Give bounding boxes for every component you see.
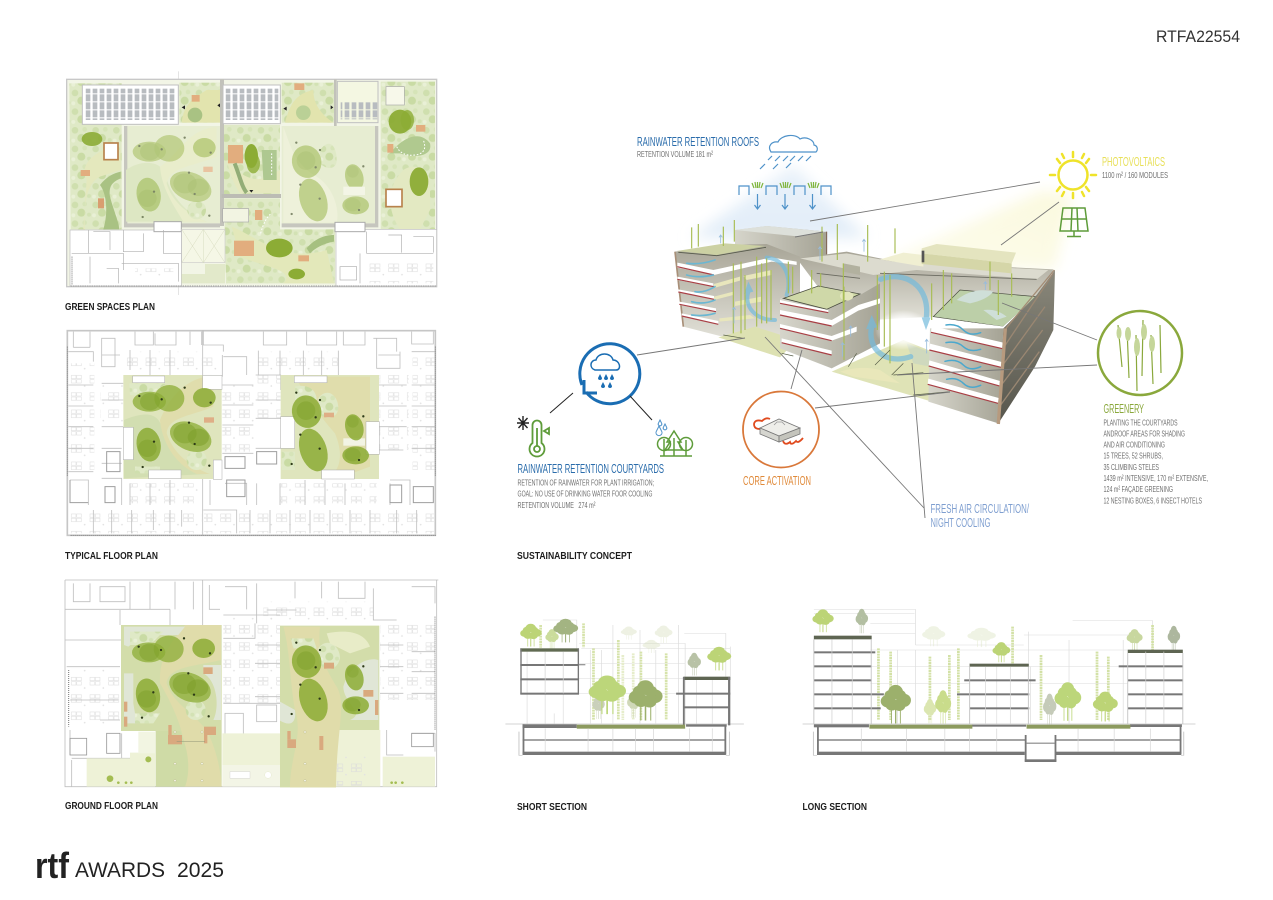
caption: typical floor plan: TYPICAL FLOOR PLAN (65, 550, 158, 562)
small garden 2 (282, 83, 334, 123)
label: photovoltaics: PHOTOVOLTAICS (1102, 155, 1165, 169)
sustainability concept diagram (517, 135, 1208, 530)
plan: typical floor (67, 330, 436, 536)
icon: thermometer (517, 416, 549, 457)
light fan: rain (690, 165, 868, 238)
label: greenery (1104, 402, 1208, 506)
label: greenery: 35 CLIMBING STELES (1104, 462, 1159, 472)
icon: greenery climbing plants (1098, 311, 1182, 395)
logo: rtf awards 2025: rtf (35, 845, 70, 886)
ground floor walls (65, 580, 438, 787)
side elevation (998, 270, 1055, 424)
left wing (675, 243, 800, 340)
icon: sun (1050, 152, 1096, 198)
caption: short section: SHORT SECTION (517, 801, 587, 813)
label: fresh air circulation (930, 502, 1029, 530)
label: rainwater retention roofs: RETENTION VOLUME 181 m² (637, 149, 713, 159)
label: greenery: PLANTING THE COURTYARDS (1104, 418, 1178, 428)
caption: sustainability concept: SUSTAINABILITY CONCEPT (517, 550, 632, 562)
logo: rtf awards 2025: AWARDS (75, 858, 165, 882)
building structure (803, 636, 1195, 762)
small upward arrows (719, 235, 987, 357)
icon: solar panel (1060, 208, 1088, 236)
offices on roof level (70, 222, 437, 286)
climbing steles (692, 220, 1012, 363)
label: fresh air circulation: FRESH AIR CIRCULATION/ (930, 502, 1029, 516)
photovoltaic roof 3 (337, 81, 378, 123)
plan: green spaces (67, 71, 437, 295)
label: rainwater retention roofs (637, 135, 759, 159)
courtyard right (281, 375, 379, 479)
interior dark ticks (723, 335, 950, 395)
arrows to cooling and trees (550, 393, 652, 420)
logo: rtf awards 2025 (35, 845, 224, 886)
icon: trees and droplets (656, 420, 692, 456)
caption: long section: LONG SECTION (802, 801, 867, 813)
green strip right (381, 82, 435, 229)
label: rainwater retention roofs: RAINWATER RETENTION ROOFS (637, 135, 759, 149)
back roof block (735, 226, 827, 265)
label: photovoltaics: 1100 m² / 160 MODULES (1102, 170, 1168, 180)
label: rainwater retention courtyards: GOAL: NO USE OF DRINKING WATER FOOR COOLING (518, 488, 652, 498)
climbers (541, 623, 666, 720)
icon: core activation (743, 392, 819, 468)
caption: ground floor plan: GROUND FLOOR PLAN (65, 800, 158, 812)
icon: green roof section with drainage (739, 182, 831, 209)
icon: rainwater cycle (580, 344, 640, 404)
small garden 1 (179, 83, 221, 123)
building structure (505, 648, 744, 755)
green roof right (933, 290, 1037, 327)
background elevation lines (814, 609, 1164, 724)
trees (812, 609, 1180, 725)
pale interior pads (87, 730, 435, 787)
rooftop technical box (843, 244, 1016, 275)
label: photovoltaics (1102, 155, 1168, 180)
label: rainwater retention courtyards: RETENTION VOLUME 274 m² (518, 500, 596, 510)
courtyard left (123, 375, 222, 479)
label: greenery: 1439 m² INTENSIVE, 170 m² EXTENSIVE, (1104, 473, 1208, 483)
lower central garden (223, 198, 335, 283)
courtyard floor right (832, 340, 937, 402)
air circulation swirls (744, 258, 931, 359)
section: long (803, 609, 1195, 762)
middle wing (780, 283, 880, 368)
courtyard floor left (718, 327, 797, 357)
light beam: sun (883, 190, 1072, 270)
label: greenery: GREENERY (1104, 402, 1144, 416)
upper roof deck (797, 252, 1053, 320)
photovoltaic roof 1 (82, 85, 178, 124)
climbers (878, 625, 1153, 720)
label: rainwater retention courtyards: RETENTION OF RAINWATER FOR PLANT IRRIGATION; (518, 478, 654, 488)
central garden (224, 125, 280, 195)
label: greenery: 124 m² FAÇADE GREENING (1104, 484, 1173, 494)
courtyard left with entry (121, 625, 222, 787)
green strip left (69, 83, 122, 229)
right wing front (928, 325, 1003, 423)
label: greenery: 15 TREES, 52 SHRUBS, (1104, 450, 1163, 460)
background elevation lines (527, 620, 730, 724)
photovoltaic roof 2 (223, 85, 280, 124)
document code: RTFA22554 (1156, 28, 1240, 46)
label: rainwater retention courtyards (518, 462, 664, 510)
isometric building (675, 220, 1055, 424)
plan: ground floor (65, 580, 438, 787)
courtyard B (282, 126, 378, 227)
leader lines (637, 182, 1097, 518)
courtyard right with entry (280, 626, 379, 787)
label: greenery: AND AIR CONDITIONING (1104, 440, 1165, 450)
logo: rtf awards 2025: 2025 (177, 858, 224, 882)
label: rainwater retention courtyards: RAINWATER RETENTION COURTYARDS (518, 462, 664, 476)
icon: rain cloud (760, 135, 817, 169)
label: greenery: ANDROOF AREAS FOR SHADING (1104, 428, 1185, 438)
label: fresh air circulation: NIGHT COOLING (930, 516, 990, 530)
label: core activation: CORE ACTIVATION (743, 474, 811, 488)
label: greenery: 12 NESTING BOXES, 6 INSECT HOTELS (1104, 496, 1202, 506)
section: short (505, 619, 744, 755)
caption: green spaces plan: GREEN SPACES PLAN (65, 301, 155, 313)
courtyard A (124, 126, 220, 227)
trees (520, 619, 731, 721)
